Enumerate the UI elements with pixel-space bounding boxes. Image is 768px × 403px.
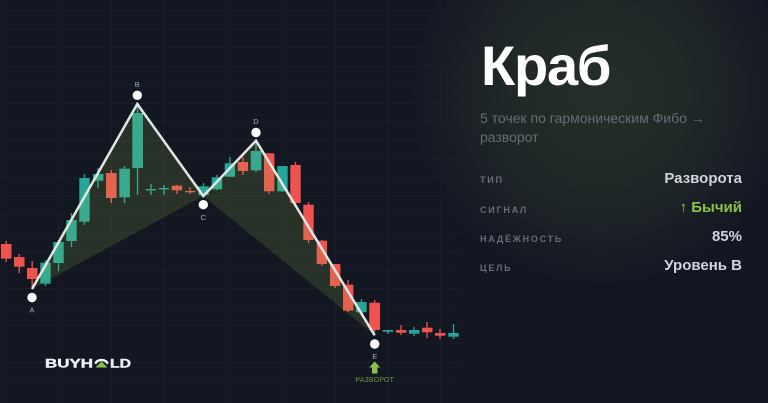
row: target: ЦЕЛЬ: [480, 263, 512, 273]
subtitle: 5 точек по гармоническим Фибо → разворот: [480, 110, 705, 145]
title: Краб: [481, 34, 610, 97]
pattern points and labels: D: [253, 117, 259, 126]
pattern points and labels: E: [372, 352, 377, 361]
pattern fill: wings A-B-C and C-D-E: [32, 104, 375, 335]
reversal label: РАЗВОРОТ: [355, 377, 395, 384]
row: reliability: 85%: [712, 228, 742, 245]
pattern points and labels: A: [29, 306, 35, 314]
row: target: [480, 257, 742, 274]
row: signal: ↑ Бычий: [680, 199, 742, 216]
row: signal: СИГНАЛ: [480, 205, 528, 215]
pattern points and labels: C: [201, 213, 207, 222]
logo: BUYHOLD: BUYH: [45, 358, 93, 370]
candlesticks: [1, 105, 459, 339]
row: signal: [480, 199, 742, 216]
row: target: Уровень В: [664, 257, 742, 274]
pattern line A-B-C-D-E: [32, 104, 375, 335]
row: type: ТИП: [480, 175, 504, 185]
row: type: Разворота: [664, 170, 742, 187]
row: reliability: НАДЁЖНОСТЬ: [480, 234, 563, 244]
row: reliability: [480, 228, 742, 245]
pattern points and labels: B: [135, 80, 140, 89]
logo: BUYHOLD: LD: [110, 358, 131, 370]
pattern points and labels: [27, 80, 379, 361]
icon: reversal arrow: [369, 362, 380, 374]
row: type: [480, 170, 742, 187]
logo: BUYHOLD: [45, 358, 131, 370]
